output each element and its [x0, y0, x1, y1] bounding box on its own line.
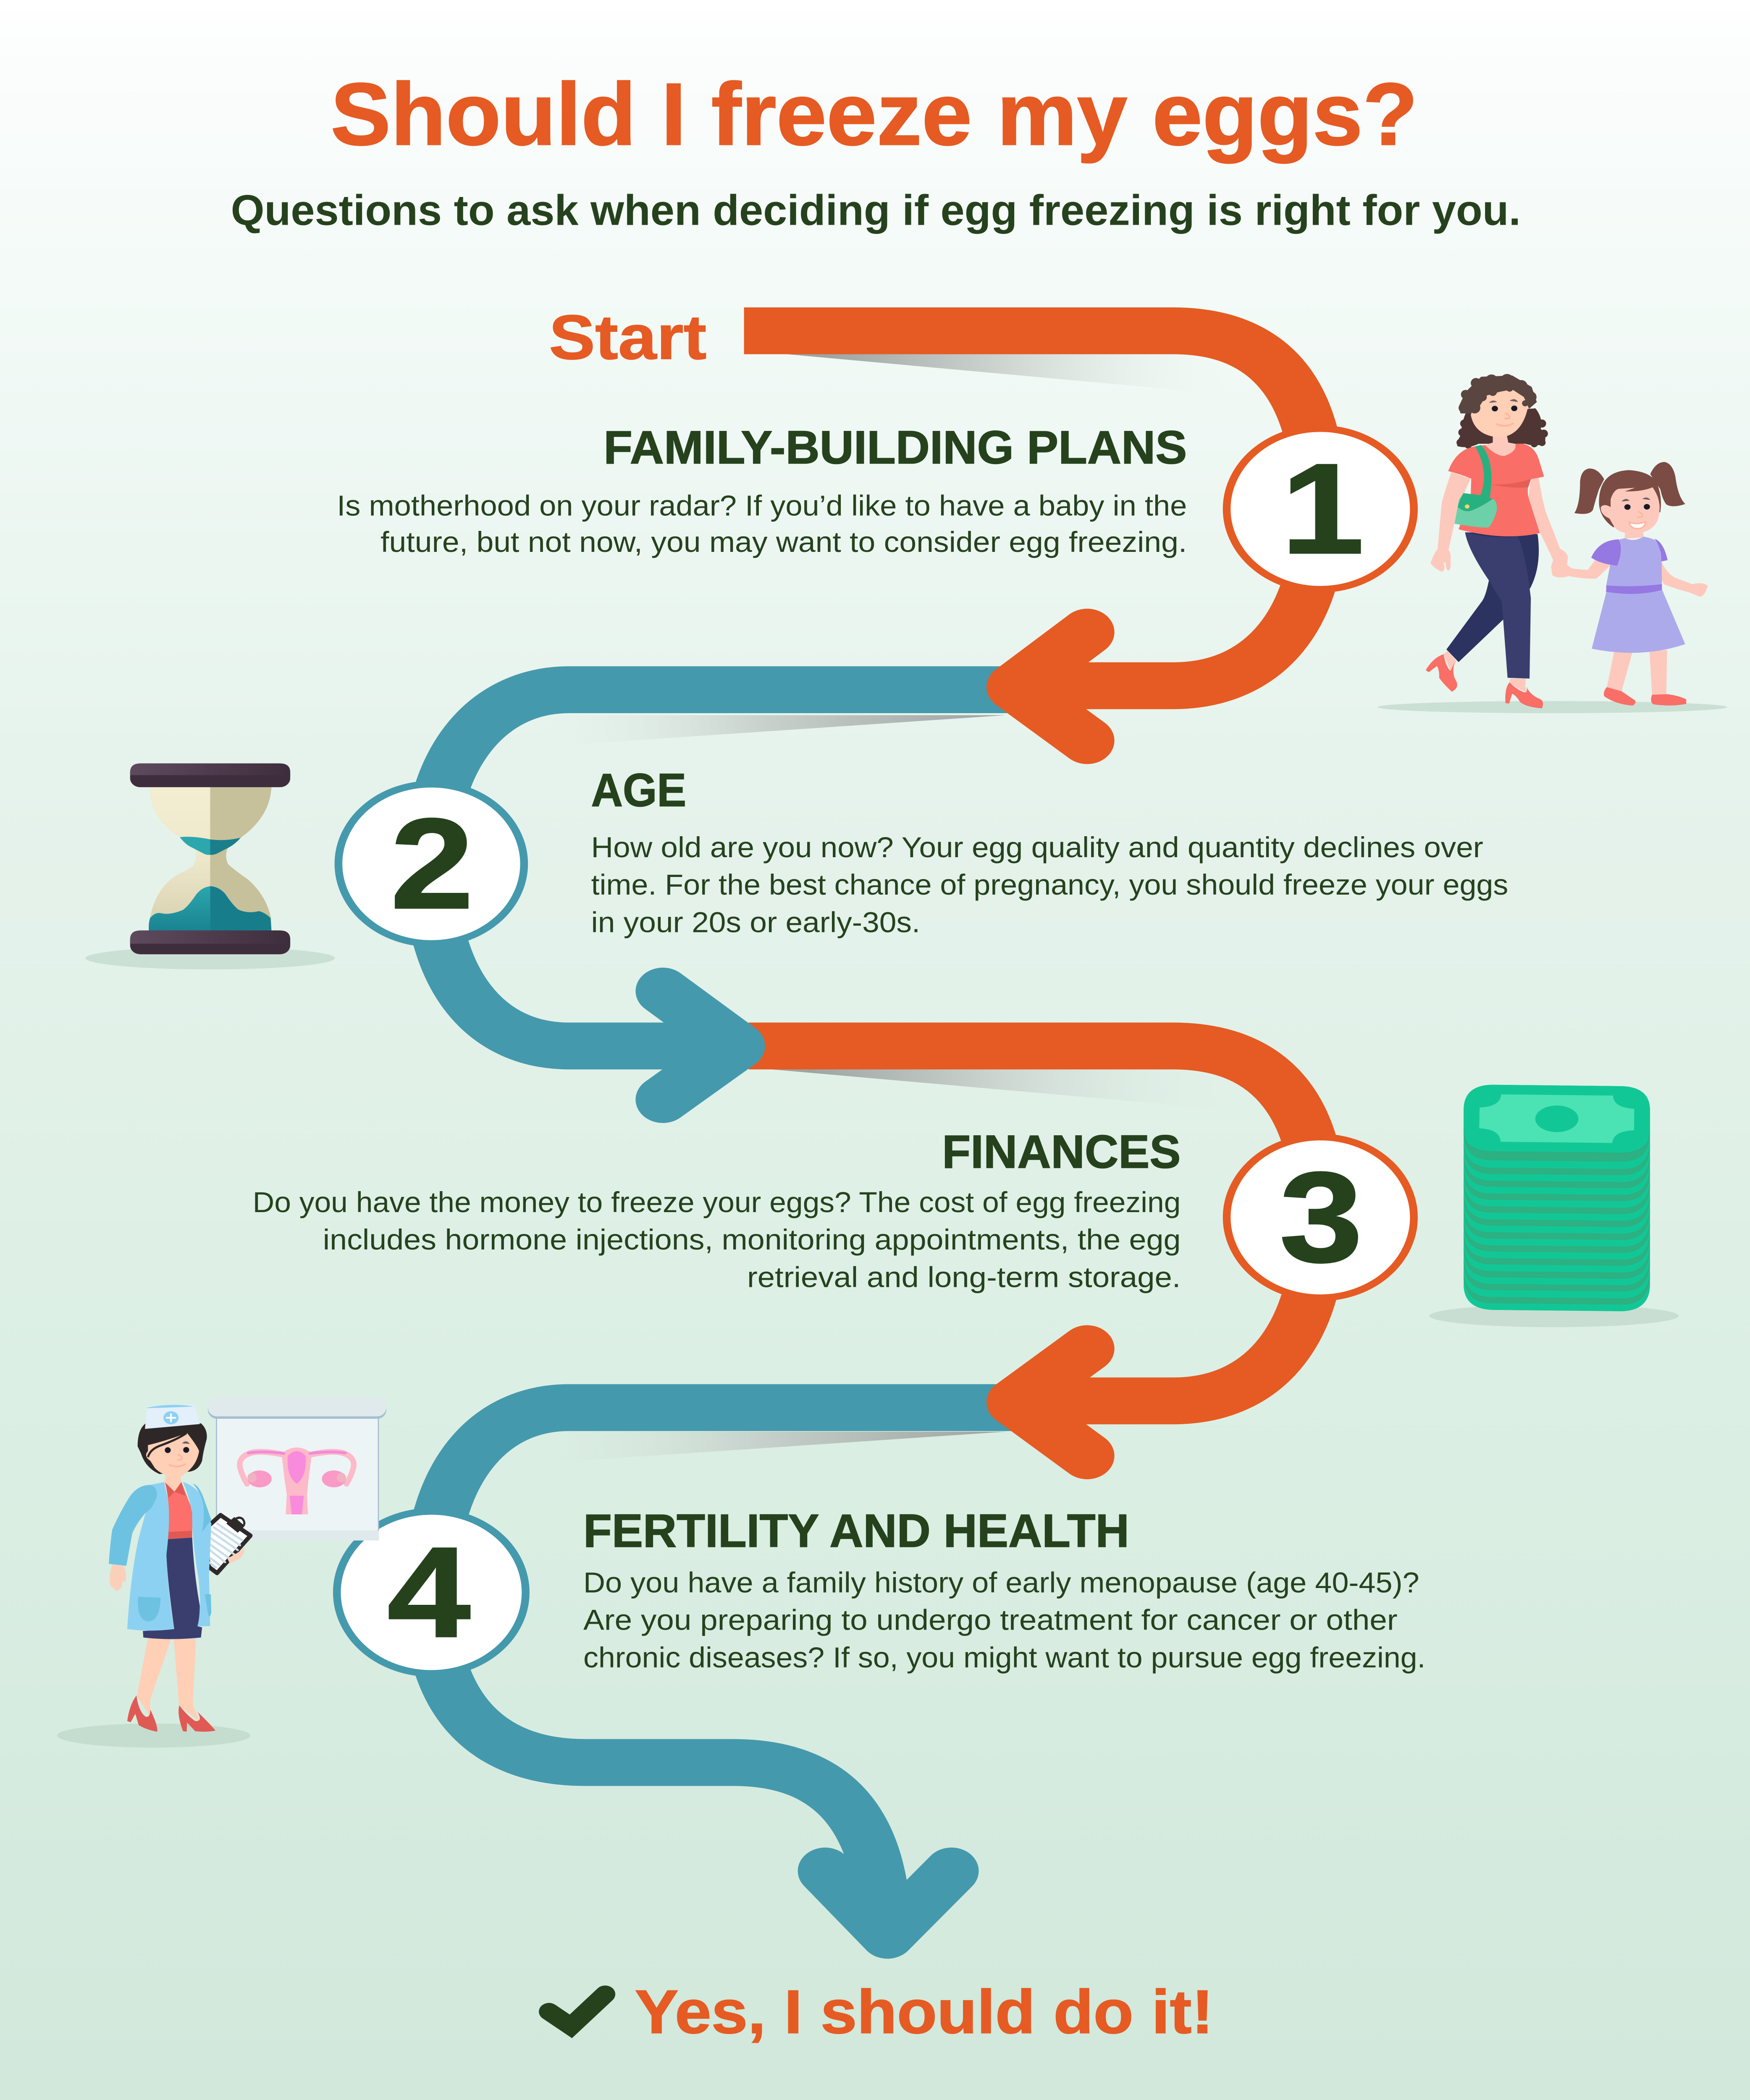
path shadows — [491, 354, 1251, 1467]
text block: age: time. For the best chance of pregnancy, you should freeze your eggs — [591, 869, 1508, 901]
coat and clothes — [109, 1473, 211, 1639]
text block: age: How old are you now? Your egg quality and quantity declines over — [591, 831, 1483, 864]
text block: fertility and health: Do you have a family history of early menopause (age 40-45)? — [583, 1567, 1419, 1599]
illustration: hourglass — [86, 764, 335, 969]
text block: fertility and health: chronic diseases? If so, you might want to pursue egg freezing. — [583, 1641, 1426, 1674]
text block: family-building plans: future, but not now, you may want to consider egg freezing. — [380, 526, 1187, 558]
text block: finances: Do you have the money to freeze your eggs? The cost of egg freezing — [253, 1186, 1181, 1218]
anatomy chart — [208, 1397, 386, 1541]
illustration: stack of money — [1429, 1085, 1679, 1327]
step 3 badge: 3 — [1280, 1145, 1363, 1289]
text block: family-building plans: Is motherhood on your radar? If you’d like to have a baby in the — [337, 490, 1187, 522]
text block: fertility and health — [583, 1504, 1426, 1674]
step 3 badge — [1227, 1137, 1414, 1298]
icon: check mark — [549, 1994, 605, 2026]
text block: finances: includes hormone injections, monitoring appointments, the egg — [323, 1223, 1181, 1256]
heading: AGE — [591, 764, 686, 816]
title: Should I freeze my eggs? — [331, 65, 1418, 164]
arrow path: orange segment 3 — [749, 1046, 1320, 1456]
clipboard — [203, 1515, 250, 1573]
head — [138, 1404, 207, 1477]
step 4 badge: 4 — [387, 1520, 472, 1664]
step 2 badge: 2 — [391, 792, 474, 935]
start label: Start — [549, 302, 706, 373]
legs and shoes — [127, 1638, 215, 1732]
subtitle: Questions to ask when deciding if egg freezing is right for you. — [231, 187, 1521, 234]
heading: FINANCES — [942, 1125, 1181, 1178]
text block: family-building plans — [337, 421, 1187, 558]
heading: FERTILITY AND HEALTH — [583, 1504, 1129, 1557]
arrow path: teal segment to finish — [430, 1407, 1014, 1935]
illustration: doctor with anatomy chart — [57, 1397, 386, 1748]
arrow path: orange segment 1 — [744, 331, 1320, 740]
step 4 badge — [337, 1512, 526, 1673]
text block: fertility and health: Are you preparing to undergo treatment for cancer or other — [583, 1604, 1398, 1636]
text block: age: in your 20s or early-30s. — [591, 906, 920, 938]
arrow path: teal segment 2 — [430, 690, 1014, 1100]
illustration: mother and daughter — [1377, 374, 1727, 713]
text block: age — [591, 764, 1508, 938]
step 1 badge: 1 — [1281, 437, 1364, 580]
step 1 badge — [1227, 428, 1414, 589]
step 2 badge — [338, 784, 524, 943]
conclusion text: Yes, I should do it! — [635, 1977, 1213, 2046]
text block: finances — [253, 1125, 1181, 1293]
text block: finances: retrieval and long-term storage. — [747, 1261, 1181, 1293]
heading: FAMILY-BUILDING PLANS — [603, 421, 1187, 473]
